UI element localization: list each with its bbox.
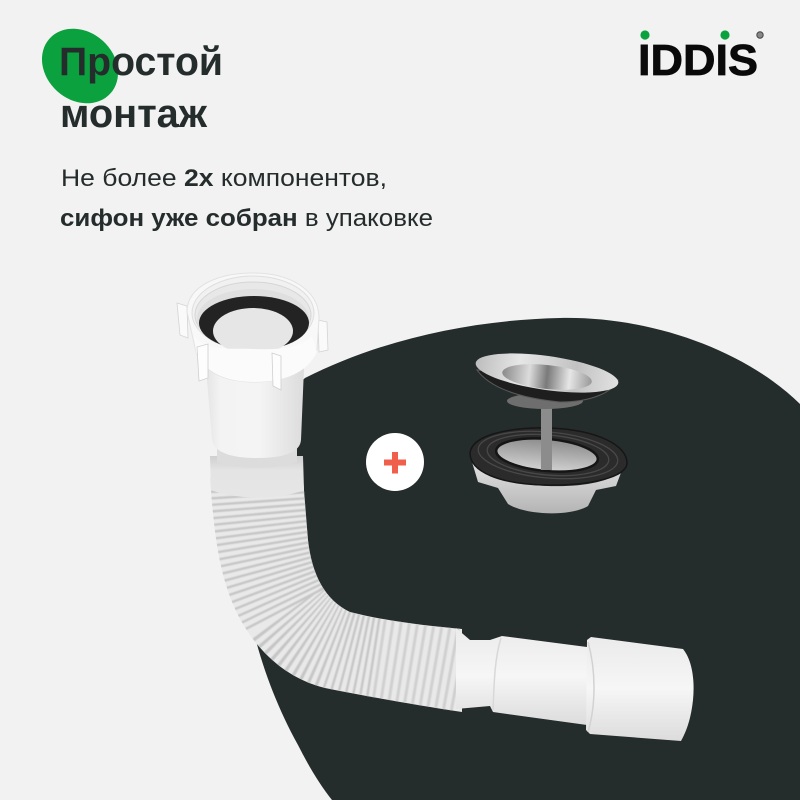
nut lugs back: [177, 303, 188, 338]
black gasket ring: [199, 296, 309, 350]
collar above hose: [210, 456, 304, 498]
strainer plate: [473, 346, 621, 400]
logo: iDDIS: IDDIS: [638, 36, 758, 85]
neck: [217, 440, 297, 468]
inner pipe opening: [213, 308, 293, 354]
subtitle text: [60, 165, 433, 232]
plastic drain body: [472, 462, 622, 513]
plus badge: [366, 433, 424, 491]
dark blob shape: [244, 318, 800, 800]
title: монтаж: [60, 92, 208, 136]
corrugated hose: [210, 478, 462, 712]
strainer cup: [501, 360, 593, 394]
subtitle text: Не более 2х компонентов,: [61, 165, 387, 192]
drain strainer set: [470, 346, 627, 513]
cup underside: [477, 370, 618, 402]
threaded nut: [187, 273, 319, 382]
nut lugs front: [197, 344, 208, 381]
subtitle text: сифон уже собран в упаковке: [60, 205, 433, 232]
nut front rim: [194, 336, 317, 382]
title: Простой: [59, 40, 223, 84]
threaded rod: [541, 405, 552, 470]
gasket opening: [495, 435, 599, 475]
outlet connector: [456, 628, 694, 741]
title: [59, 40, 223, 136]
strainer base disc: [507, 393, 583, 409]
body tube: [206, 368, 304, 458]
green accent blob: [27, 13, 133, 119]
gasket: [470, 428, 627, 485]
siphon hose assembly: [177, 273, 694, 741]
